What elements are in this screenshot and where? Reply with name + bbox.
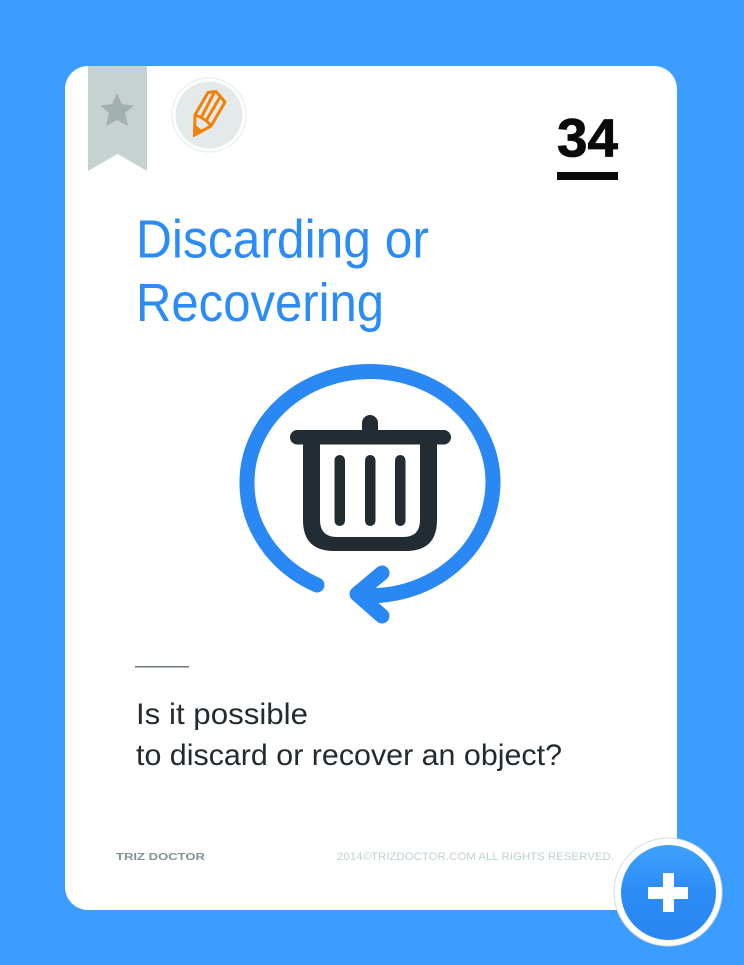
icon: pencil badge (172, 78, 246, 152)
panel: white card (65, 66, 677, 910)
number badge: 34: 34 (557, 108, 618, 168)
question text: Is it possible (136, 698, 308, 731)
title: Discarding or (136, 210, 429, 270)
footer copyright: 2014©TRIZDOCTOR.COM ALL RIGHTS RESERVED. (337, 851, 614, 863)
button: plus (614, 838, 722, 946)
divider rule (135, 666, 189, 668)
icon: bookmark with star (88, 66, 147, 171)
icon: circular recovery arrow (247, 372, 493, 616)
footer brand: TRIZ DOCTOR (116, 851, 206, 863)
title: Recovering (136, 273, 384, 333)
question text (136, 698, 562, 772)
icon: trash can (290, 415, 451, 551)
title (136, 210, 429, 333)
question text: to discard or recover an object? (136, 739, 562, 772)
